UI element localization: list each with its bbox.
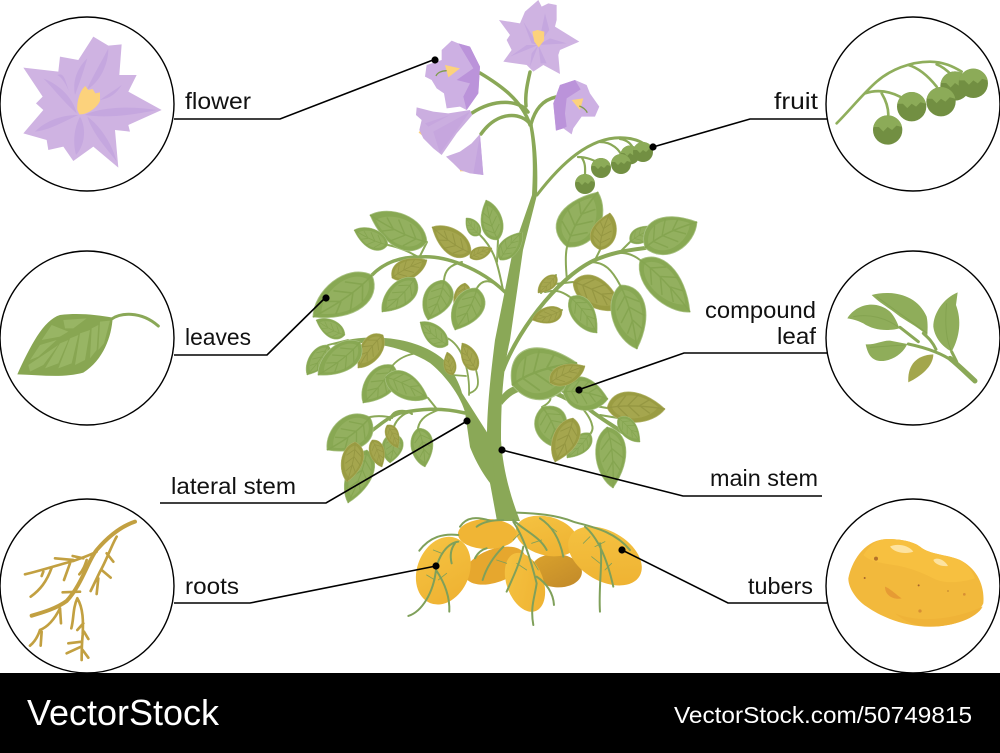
roots	[408, 513, 630, 625]
circle: fruit	[826, 17, 1000, 191]
right lateral stem	[500, 384, 580, 406]
label: fruit: fruit	[774, 88, 819, 114]
fruits	[575, 142, 653, 194]
flower: right bell	[553, 80, 599, 134]
tubers	[406, 509, 652, 617]
inset compound leaf	[847, 292, 975, 382]
label: compound leaf: compound	[705, 297, 816, 323]
footer logo: VectorStock	[27, 692, 220, 733]
inset flower	[23, 37, 162, 168]
label: roots: roots	[185, 573, 239, 599]
plant	[300, 0, 705, 625]
inset leaf	[17, 314, 158, 376]
label: flower: flower	[185, 88, 251, 114]
circle: leaves	[0, 251, 174, 425]
inset fruit	[837, 62, 988, 145]
circle: flower	[0, 17, 174, 191]
label: main stem: main stem	[710, 465, 818, 491]
label: compound leaf: leaf	[777, 323, 817, 349]
circle: tubers	[826, 499, 1000, 673]
footer url: VectorStock.com/50749815	[674, 702, 972, 728]
inset roots	[25, 522, 135, 660]
main stem	[487, 122, 537, 521]
callout lines	[160, 60, 827, 603]
label: lateral stem: lateral stem	[171, 473, 296, 499]
circle: roots	[0, 499, 174, 673]
circle: compound leaf	[826, 251, 1000, 425]
flower: small trumpet	[446, 134, 483, 175]
tubers and roots	[406, 509, 652, 625]
stems and branches	[328, 72, 650, 443]
callout dots	[322, 56, 657, 570]
flower: trumpet	[416, 107, 472, 155]
flowers	[416, 0, 599, 175]
flower: left bell	[425, 41, 480, 110]
inset tuber	[848, 539, 984, 627]
footer bar	[0, 673, 1000, 753]
flower: open star	[499, 0, 579, 74]
label: leaves: leaves	[185, 324, 251, 350]
upper leaves	[303, 181, 705, 374]
label: tubers: tubers	[748, 573, 813, 599]
lower leaves	[300, 313, 665, 508]
lateral stem	[333, 338, 497, 500]
